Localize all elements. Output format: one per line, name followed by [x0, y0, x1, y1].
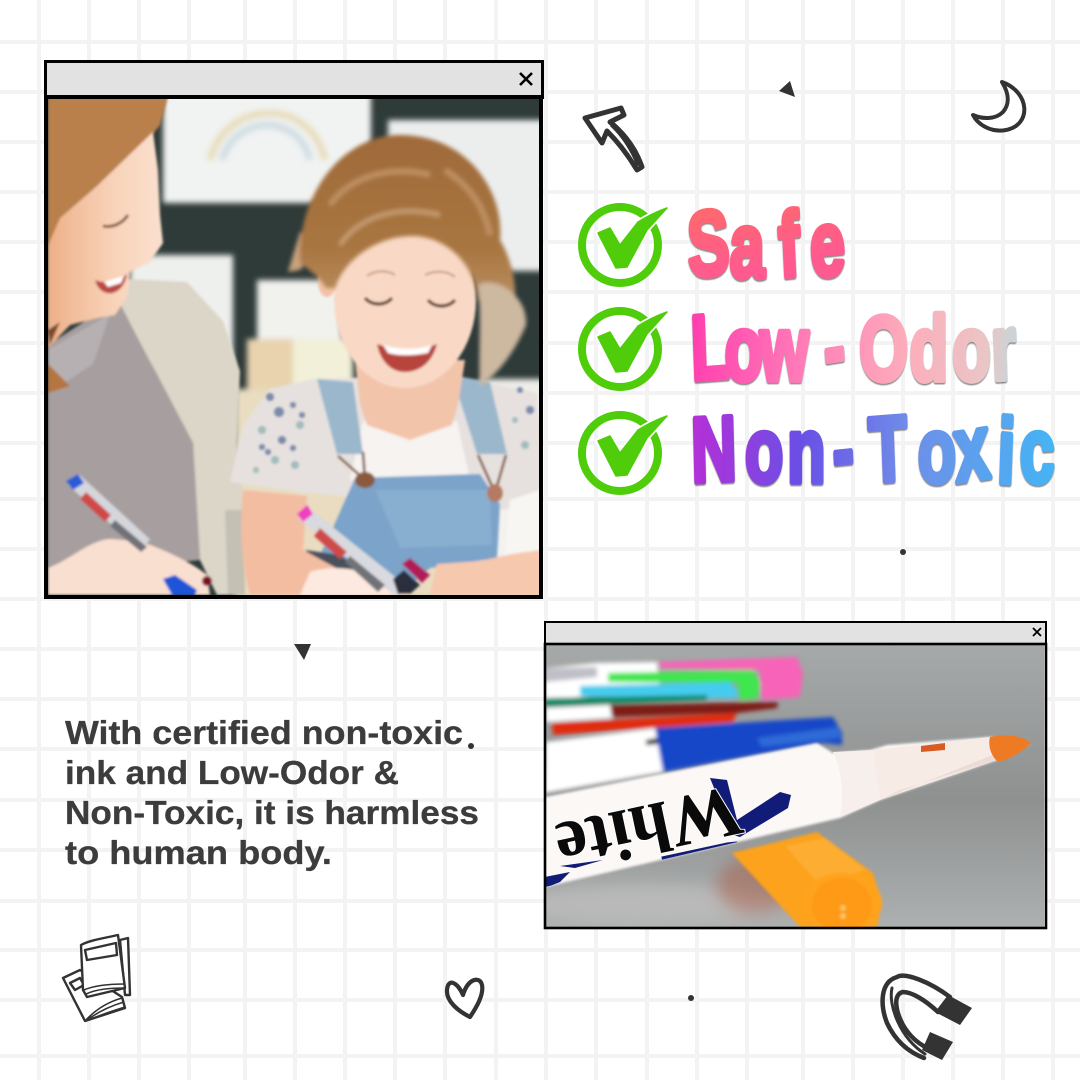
shirt flower pattern [253, 387, 534, 473]
cap shadow [717, 857, 793, 913]
panel: photo window with markers [520, 622, 1046, 933]
decoration: triangle [779, 81, 795, 97]
text block: description: Non-Toxic, it is harmless [65, 794, 479, 831]
girl [230, 212, 545, 595]
check list: safe [582, 190, 847, 297]
icon: green check [582, 415, 667, 491]
decoration: down triangle [294, 644, 311, 660]
main white marker [545, 735, 1031, 888]
icon: heart doodle [447, 980, 482, 1017]
window title bar [46, 62, 542, 98]
icon: books doodle [63, 935, 130, 1021]
icon: magnet doodle [883, 976, 972, 1060]
photo: mother and daughter drawing with markers [48, 90, 555, 599]
icon: green check [582, 207, 667, 283]
photo: markers with orange tip [520, 645, 1044, 933]
label: Safe: Safe [685, 190, 847, 297]
label: Low-Odor: Low-Odor [689, 294, 1018, 400]
text block: description: With certified non-toxic [65, 714, 463, 751]
orange cap [732, 832, 882, 933]
check list: non-toxic [582, 394, 1055, 503]
label: Non-Toxic: Non-Toxic [690, 394, 1055, 503]
text block: description [65, 714, 479, 871]
icon: green check [582, 311, 667, 387]
text block: description: ink and Low-Odor & [65, 754, 399, 791]
marker brand lettering: White [549, 770, 749, 888]
blue swoosh on marker label [710, 778, 791, 837]
decoration: dot [900, 549, 906, 555]
girl's hair [288, 135, 526, 387]
window title bar [545, 622, 1046, 644]
decoration: arrow doodle [585, 108, 642, 170]
decoration: moon doodle [973, 82, 1024, 131]
check list: low-odor [582, 294, 1018, 400]
decoration: dot [688, 995, 694, 1001]
panel: photo window with mother and child [46, 62, 555, 599]
decoration: dot [468, 743, 474, 749]
woman [48, 97, 245, 595]
photo frame [545, 644, 1046, 928]
photo frame [46, 97, 541, 597]
text block: description: to human body. [65, 834, 332, 871]
